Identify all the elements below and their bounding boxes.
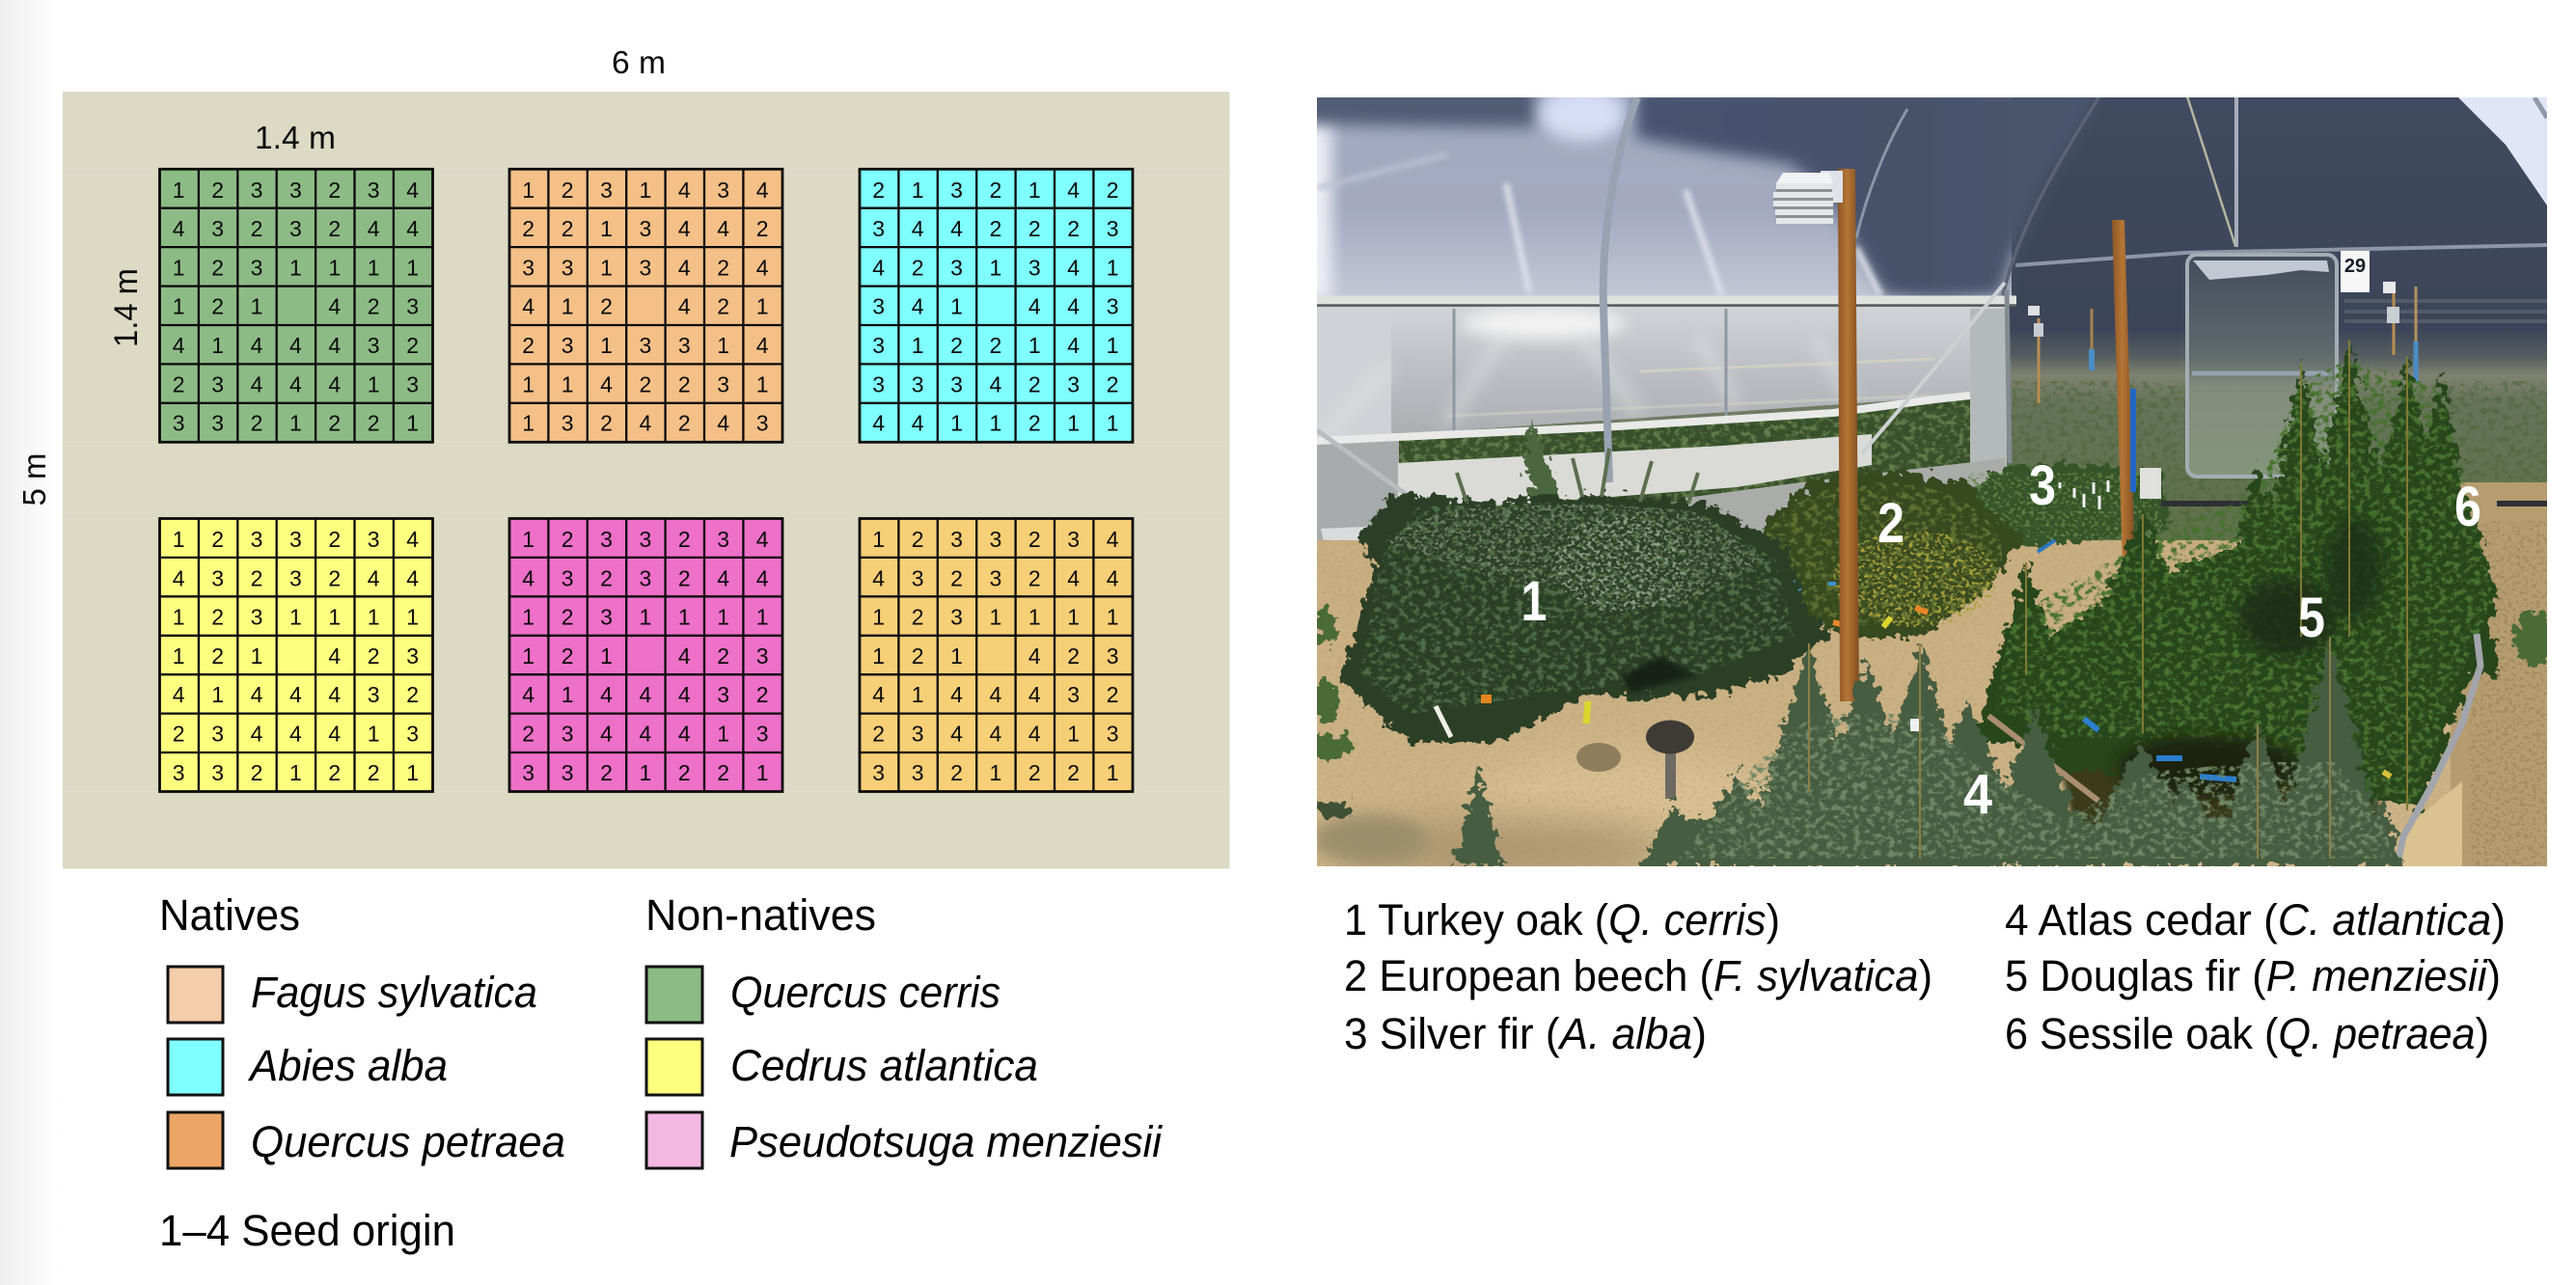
plot: Pseudotsuga menziesii: 1233234 bbox=[522, 527, 769, 552]
caption: species key right column: 4 Atlas cedar (C. atlantica) bbox=[2005, 895, 2506, 944]
plot: Fagus sylvatica: 1142231 bbox=[522, 371, 768, 396]
legend: natives bbox=[159, 890, 565, 1168]
dimension label: 6 m: 6 m bbox=[612, 44, 666, 80]
end wall and background vegetation bbox=[1978, 96, 2547, 560]
legend item: Quercus petraea: Quercus petraea bbox=[251, 1117, 565, 1166]
door frame bbox=[2187, 255, 2337, 477]
caption: species key left column bbox=[1344, 895, 1932, 1058]
lower openings and white fabric bbox=[1317, 97, 2010, 585]
plant group 3: silver fir bbox=[1968, 458, 2176, 554]
photo number 4: 4 bbox=[1963, 763, 1992, 826]
legend item: Quercus petraea bbox=[168, 1112, 565, 1168]
legend item: Quercus cerris bbox=[646, 967, 1000, 1023]
low plants left edge bbox=[1309, 608, 2553, 818]
plot: Quercus petraea: 1231111 bbox=[872, 605, 1118, 630]
plot: Quercus cerris: 1233234 bbox=[173, 178, 419, 203]
caption: species key left column: 3 Silver fir (A. alba) bbox=[1344, 1009, 1707, 1058]
legend: non-natives bbox=[645, 890, 1164, 1168]
legend item: Abies alba: Abies alba bbox=[247, 1041, 448, 1090]
legend item: Quercus cerris: Quercus cerris bbox=[730, 968, 1000, 1017]
caption: species key left column: 2 European beech (F. sylvatica) bbox=[1344, 951, 1932, 1000]
plot: Quercus petraea: 4323244 bbox=[872, 565, 1119, 590]
photo number 2: 2 bbox=[1877, 492, 1905, 555]
panel: plot plan bbox=[63, 92, 1229, 868]
plot: Quercus cerris: 4144432 bbox=[173, 333, 419, 358]
plot: Pseudotsuga menziesii: 3321221 bbox=[522, 760, 768, 785]
ground under firs bbox=[2057, 766, 2385, 826]
plot: Fagus sylvatica: 412421 bbox=[522, 294, 768, 319]
legend item: Fagus sylvatica: Fagus sylvatica bbox=[251, 968, 537, 1017]
plot: Quercus cerris: 4323244 bbox=[173, 216, 419, 241]
plot: Abies alba: 4411211 bbox=[872, 411, 1118, 436]
plot: Fagus sylvatica bbox=[509, 169, 782, 442]
plot: Fagus sylvatica: 3313424 bbox=[522, 255, 769, 280]
plot: Quercus petraea: 121423 bbox=[872, 643, 1118, 669]
plot: Abies alba: 3442223 bbox=[872, 216, 1118, 241]
soil bbox=[1312, 482, 2547, 878]
plot: Abies alba: 2132142 bbox=[872, 178, 1118, 203]
plot: Pseudotsuga menziesii: 121423 bbox=[522, 643, 768, 669]
photo number 3: 3 bbox=[2029, 454, 2056, 517]
photo number 6: 6 bbox=[2454, 476, 2481, 538]
plot: Quercus cerris: 3321221 bbox=[173, 411, 419, 436]
plot: Cedrus atlantica: 1233234 bbox=[173, 527, 419, 552]
plot: Abies alba: 341443 bbox=[872, 294, 1118, 319]
plot: Quercus petraea: 1233234 bbox=[872, 527, 1119, 552]
plot: Quercus petraea: 4144432 bbox=[872, 682, 1118, 707]
photo: greenhouse planting bbox=[1293, 77, 2553, 878]
distant poles bbox=[2028, 282, 2416, 403]
irrigation pipe front bbox=[2398, 634, 2480, 861]
dimension label: 1.4 m horizontal: 1.4 m bbox=[255, 120, 336, 155]
plot: Quercus petraea: 2344413 bbox=[872, 722, 1118, 747]
plot: Quercus petraea: 3321221 bbox=[872, 760, 1118, 785]
sign: plot number 29 bbox=[2341, 251, 2370, 292]
photo number 5: 5 bbox=[2298, 587, 2325, 649]
plot: Quercus petraea bbox=[860, 519, 1133, 791]
plot: Fagus sylvatica: 2313314 bbox=[522, 333, 769, 358]
plant group 4: Atlas cedar bbox=[1453, 637, 2402, 868]
dimension label: 1.4 m vertical: 1.4 m bbox=[108, 268, 145, 347]
sign: plot number 29: 29 bbox=[2344, 256, 2366, 277]
left roof plastic bbox=[1317, 97, 2101, 307]
plot: Pseudotsuga menziesii bbox=[509, 519, 782, 791]
plot: Fagus sylvatica: 1231434 bbox=[522, 178, 769, 203]
caption: species key right column: 6 Sessile oak (Q. petraea) bbox=[2005, 1009, 2489, 1058]
legend note: seed origin: 1–4 Seed origin bbox=[159, 1206, 455, 1255]
legend item: Abies alba bbox=[168, 1039, 448, 1095]
plot: Quercus cerris: 2344413 bbox=[173, 371, 419, 396]
caption: species key right column bbox=[2005, 895, 2506, 1058]
plot: Cedrus atlantica: 121423 bbox=[173, 643, 419, 669]
wooden pole with sensor bbox=[1773, 169, 1859, 701]
side wall and purlin bbox=[1317, 300, 2016, 453]
plot: Cedrus atlantica: 4144432 bbox=[173, 682, 419, 707]
plot: Cedrus atlantica: 2344413 bbox=[173, 722, 419, 747]
rear wooden pole bbox=[2112, 220, 2161, 569]
plot: Pseudotsuga menziesii: 4323244 bbox=[522, 565, 769, 590]
plot: Quercus cerris: 1231111 bbox=[173, 255, 419, 280]
shadow and solar lamp bbox=[1576, 720, 1694, 799]
plot: Cedrus atlantica: 4323244 bbox=[173, 565, 419, 590]
plot: Pseudotsuga menziesii: 2344413 bbox=[522, 722, 768, 747]
plot: Quercus cerris: 121423 bbox=[173, 294, 419, 319]
plot: Cedrus atlantica: 3321221 bbox=[173, 760, 419, 785]
plot: Abies alba: 3122141 bbox=[872, 333, 1118, 358]
legend item: Pseudotsuga menziesii: Pseudotsuga menziesii bbox=[729, 1117, 1164, 1166]
caption: species key left column: 1 Turkey oak (Q. cerris) bbox=[1344, 895, 1780, 944]
legend heading: Natives: Natives bbox=[159, 890, 300, 940]
irrigation pipes rear bbox=[2161, 501, 2547, 506]
plot: Abies alba: 4231341 bbox=[872, 255, 1118, 280]
plot: Fagus sylvatica: 1324243 bbox=[522, 411, 768, 436]
photo number 1: 1 bbox=[1521, 570, 1548, 633]
plot: Pseudotsuga menziesii: 4144432 bbox=[522, 682, 768, 707]
legend item: Cedrus atlantica bbox=[646, 1039, 1038, 1095]
plant group 5 and 6: Douglas fir and sessile oak bbox=[1973, 340, 2499, 810]
plant group 1: Turkey oak bbox=[1340, 419, 1828, 743]
plot: Cedrus atlantica: 1231111 bbox=[173, 605, 419, 630]
plant group 2: European beech bbox=[1742, 470, 2022, 642]
legend item: Fagus sylvatica bbox=[168, 967, 537, 1023]
plot: Quercus cerris bbox=[160, 169, 432, 442]
plot: Abies alba: 3334232 bbox=[872, 371, 1118, 396]
plot: Pseudotsuga menziesii: 1231111 bbox=[522, 605, 768, 630]
caption: species key right column: 5 Douglas fir (P. menziesii) bbox=[2005, 951, 2501, 1000]
plot: Abies alba bbox=[860, 169, 1133, 442]
plot: Cedrus atlantica bbox=[160, 519, 432, 791]
plot: Fagus sylvatica: 2213442 bbox=[522, 216, 768, 241]
legend heading: Non-natives: Non-natives bbox=[645, 890, 876, 940]
legend item: Cedrus atlantica: Cedrus atlantica bbox=[730, 1041, 1038, 1090]
dimension label: 5 m: 5 m bbox=[16, 453, 52, 506]
